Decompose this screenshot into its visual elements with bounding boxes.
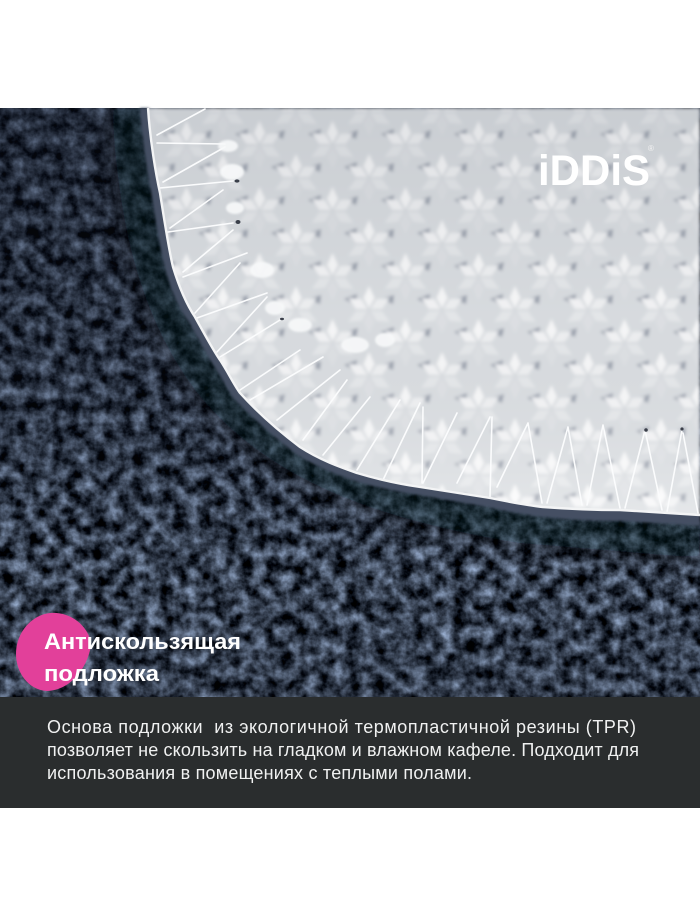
description text: позволяет не скользить на гладком и влажном кафеле. Подходит для [47,740,639,760]
logo: iDDiS: iDDiS [538,147,650,195]
stitched seam threads [157,109,698,513]
thread knots [218,140,395,353]
description panel [0,697,700,808]
heading: Антискользящая [44,629,241,654]
contact shadow beside mat edge [130,108,700,540]
needle holes [234,179,684,432]
heading [44,629,241,686]
photo: white textured anti-slip backing [140,108,700,528]
photo: mat underside rim [140,108,700,526]
photo: mat edge binding [148,108,700,515]
description text [47,717,639,783]
heading: подложка [44,661,160,686]
description text: Основа подложки из экологичной термопластичной резины (TPR) [47,717,636,737]
description text: использования в помещениях с теплыми полами. [47,763,472,783]
registered mark: ® [648,144,654,153]
photo: dark blue fluffy bath mat [0,108,700,697]
pink accent blob [16,613,91,691]
